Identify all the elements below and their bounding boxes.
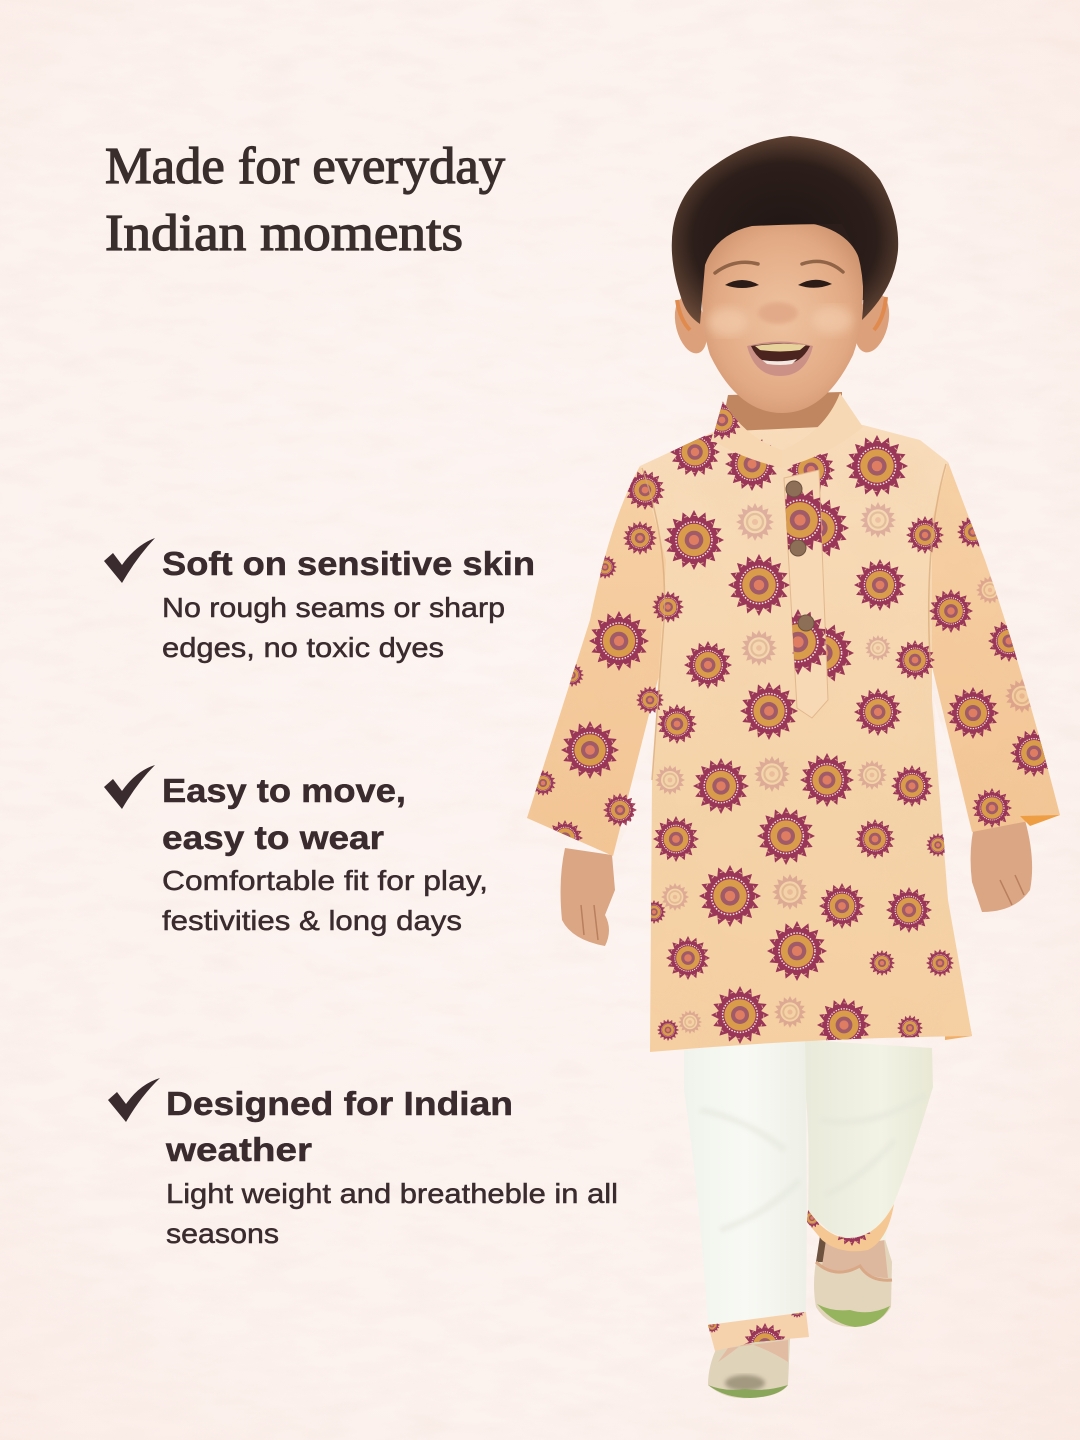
cheeks [708,306,852,336]
icon: check mark [104,765,155,809]
trousers [684,1038,933,1367]
benefit description [162,865,488,936]
hands [561,820,1032,946]
benefit heading: Soft on sensitive skin [162,545,535,582]
neck [722,392,842,452]
benefit description: Light weight and breatheble in all [166,1178,618,1209]
title [105,138,505,262]
kurta print medallions [530,427,1058,1052]
ears [669,290,895,357]
sleeve seams [642,464,946,780]
benefit description: seasons [166,1218,279,1249]
kurta [520,393,1070,1060]
benefit heading: Easy to move, [162,772,406,809]
icon: check mark [104,538,155,583]
benefit description: Comfortable fit for play, [162,865,488,896]
hair [672,136,898,324]
shoes [708,1236,892,1398]
benefit description: No rough seams or sharp [162,592,505,623]
hair back layer [700,180,868,300]
eyes [725,280,832,288]
benefit: easy to move [104,765,488,936]
back cuff [802,1204,894,1251]
benefit description [162,592,505,663]
buttons [786,481,814,631]
eyebrows [715,261,843,273]
head [669,136,898,413]
smile [747,342,813,376]
fabric mottling [933,710,942,812]
benefit heading: weather [165,1131,312,1168]
collar [702,393,863,468]
icon: check mark [108,1078,160,1122]
nose [758,302,798,324]
title: Indian moments [105,205,463,262]
trouser folds [700,1095,925,1230]
benefit heading: easy to wear [162,819,384,856]
benefit description: edges, no toxic dyes [162,632,444,663]
face [702,220,863,413]
benefit heading [165,1085,513,1168]
benefit: designed for Indian weather [108,1078,618,1249]
title: Made for everyday [105,138,505,195]
benefit heading: Designed for Indian [166,1085,513,1122]
benefit description [166,1178,618,1249]
placket [784,469,828,718]
benefit: soft on sensitive skin [104,538,535,663]
front cuff [708,1312,809,1351]
benefit heading [162,772,406,856]
photo: smiling boy in kurta [520,136,1070,1398]
benefit description: festivities & long days [162,905,462,936]
